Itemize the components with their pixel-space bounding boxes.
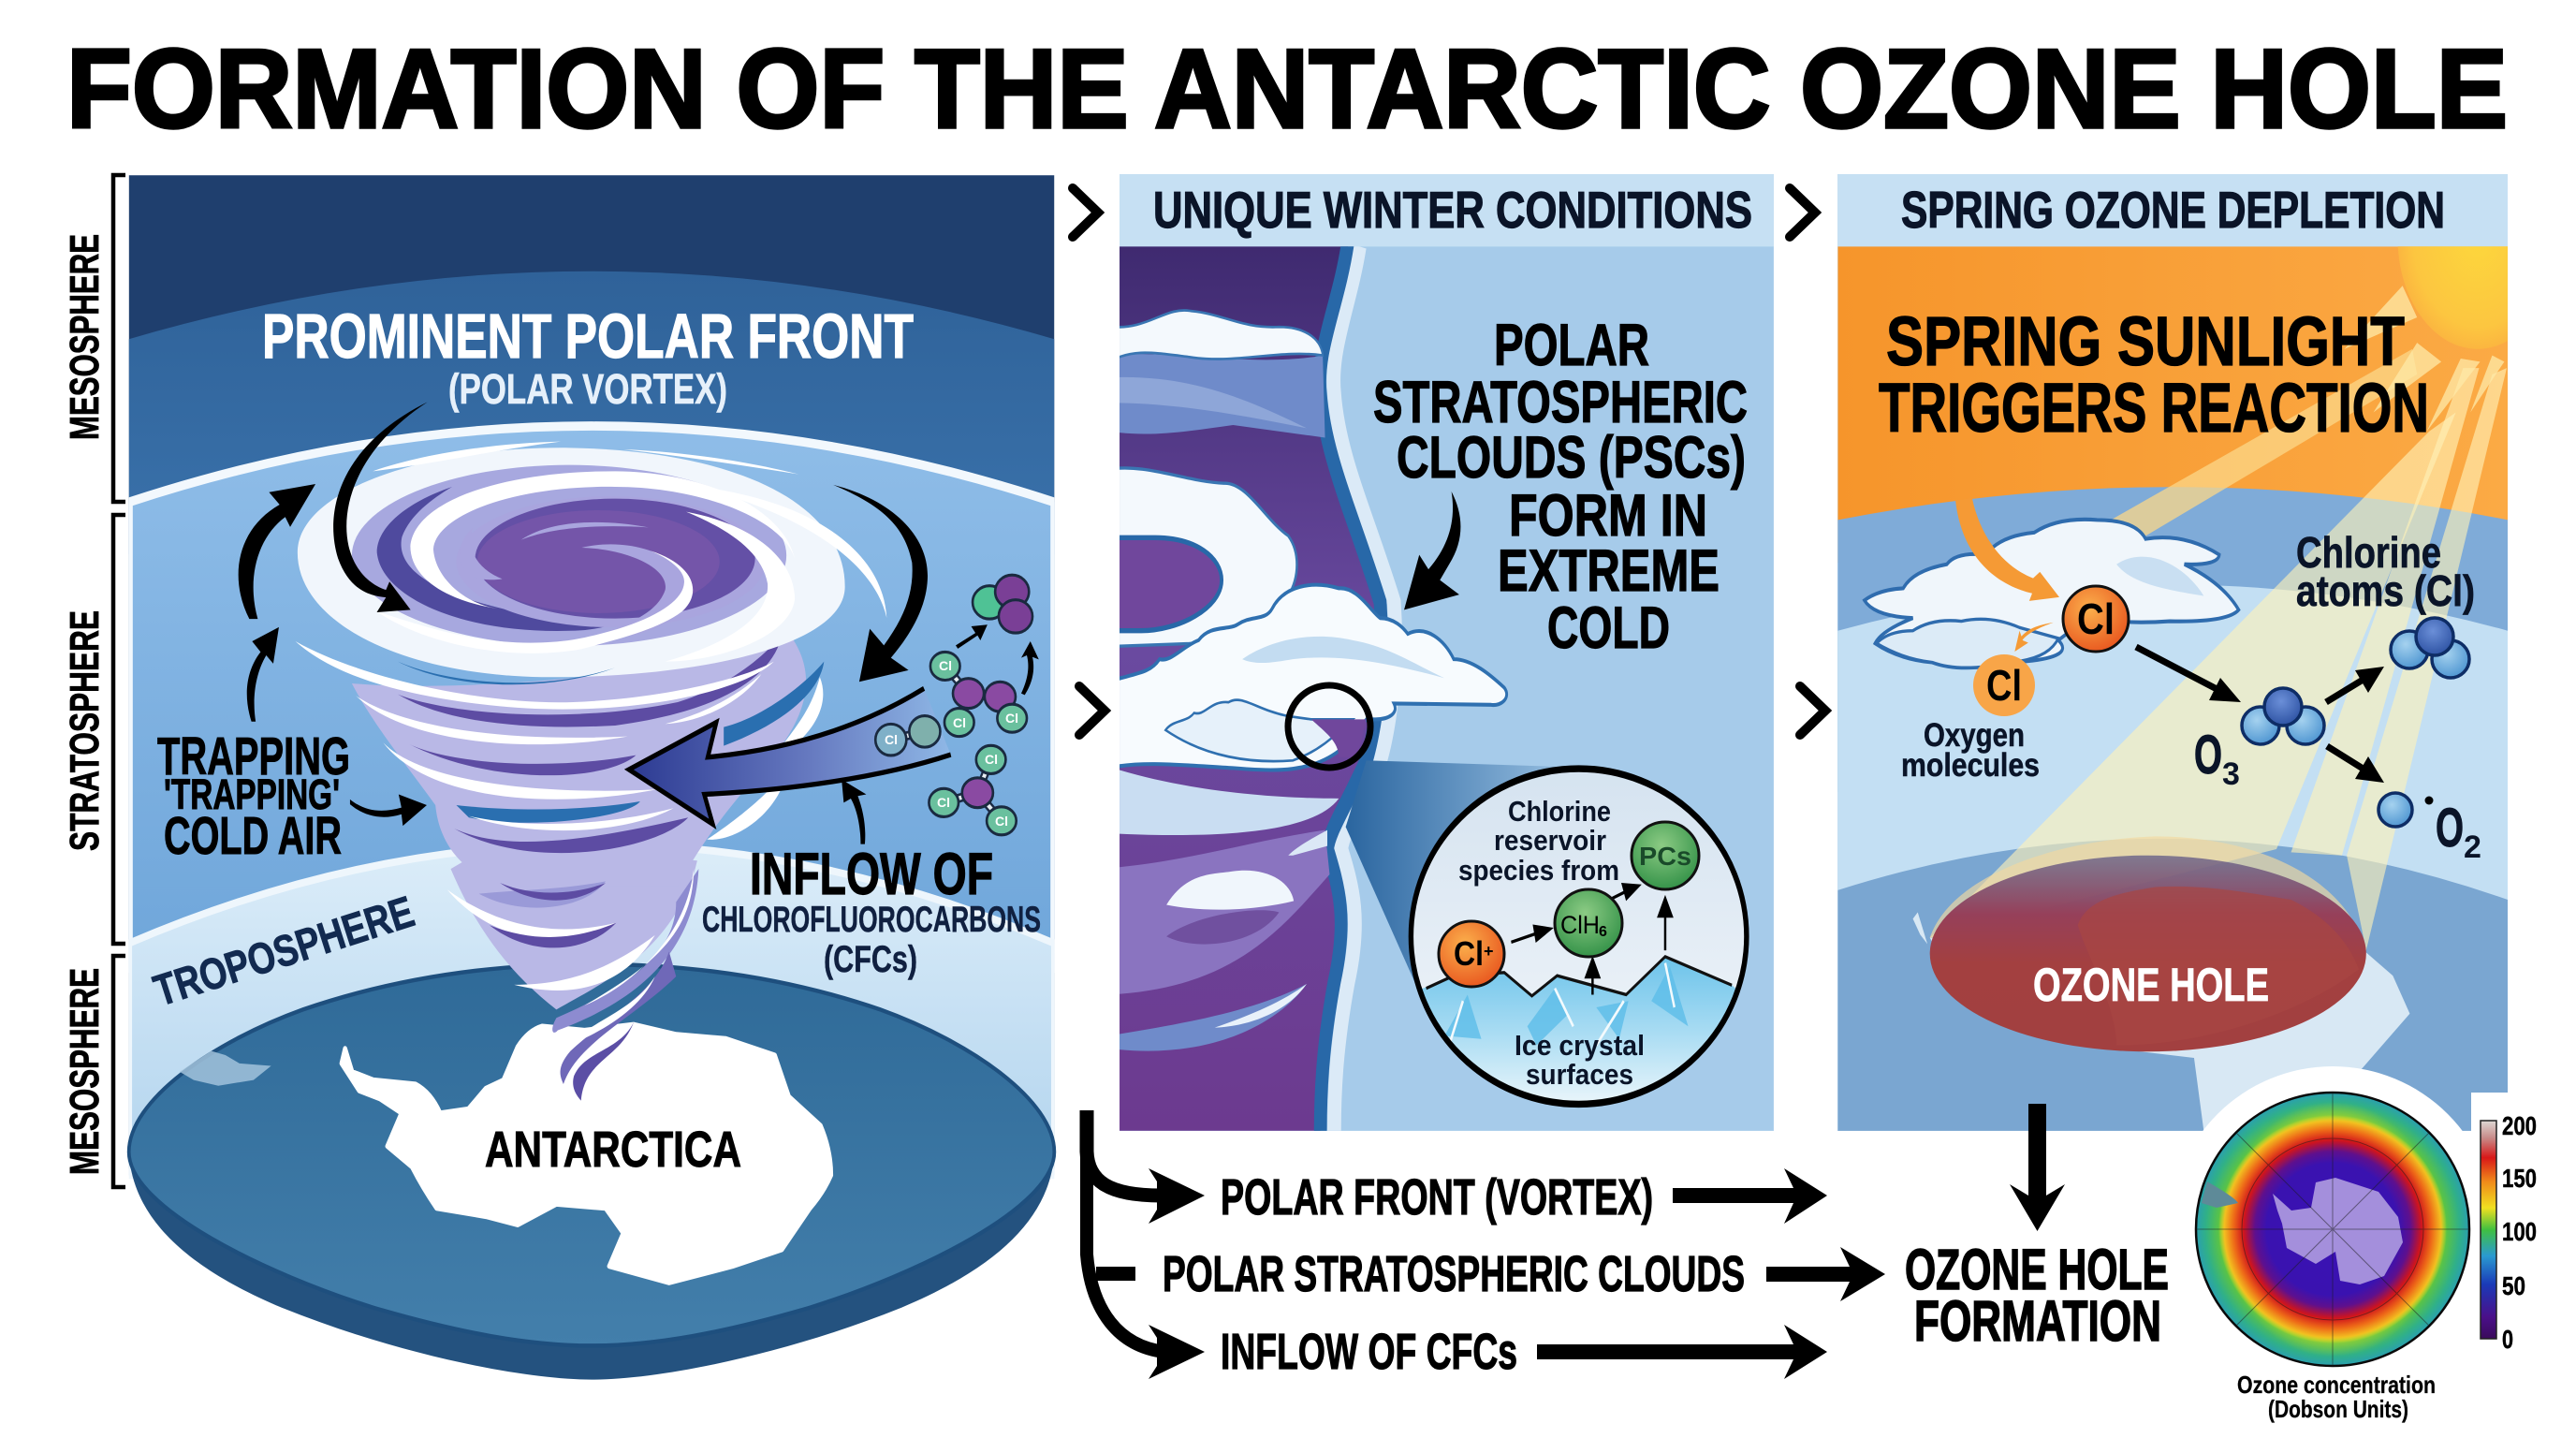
arrow: clouds to formation — [1766, 1247, 1885, 1301]
arrow: polar front to formation — [1673, 1168, 1827, 1224]
flow label: polar front: POLAR FRONT (VORTEX) — [1221, 1169, 1653, 1225]
colorbar — [2481, 1111, 2537, 1354]
inset: chlorine reactions on ice crystal: reservoir — [1494, 824, 1606, 857]
map caption — [2237, 1371, 2436, 1423]
inset zoom funnel — [1346, 760, 1601, 982]
label: Antarctica: ANTARCTICA — [485, 1122, 741, 1178]
atmospheric layer labels: MESOSPHERE — [62, 234, 108, 440]
headings and labels: Oxygen — [1924, 717, 2025, 754]
inset: chlorine reactions on ice crystal: 6 — [1599, 924, 1607, 940]
panel: atmosphere and polar vortex — [62, 175, 1054, 1380]
inset: chlorine reactions on ice crystal: surfaces — [1526, 1058, 1633, 1091]
text: polar stratospheric clouds form in extreme cold: POLAR — [1494, 313, 1649, 378]
arrow: trapping — [350, 795, 427, 826]
white halo and ozone map — [2170, 1066, 2513, 1392]
magnifier on cloud — [1288, 685, 1370, 768]
arrow: circulation left lower — [247, 627, 279, 722]
result: ozone hole formation: FORMATION — [1914, 1289, 2161, 1353]
earth disk with Antarctica — [129, 964, 1054, 1380]
colorbar: 100 — [2502, 1217, 2537, 1246]
result: ozone hole formation — [1905, 1238, 2169, 1353]
inset: chlorine reactions on ice crystal: species from — [1458, 854, 1619, 887]
ozone molecules and reaction arrows — [2136, 618, 2469, 827]
headings and labels: Chlorine — [2296, 528, 2441, 577]
headings and labels: molecules — [1901, 747, 2040, 784]
molecules: Cl — [985, 752, 998, 767]
atmospheric layer labels: MESOSPHERE — [62, 968, 108, 1175]
headings and labels — [1879, 181, 2481, 1011]
polar vortex — [296, 442, 886, 1101]
molecules — [875, 575, 1039, 835]
map caption: Ozone concentration — [2237, 1371, 2436, 1399]
headings and labels: O — [2436, 798, 2464, 858]
arrow: orange pointing to chlorine — [1955, 498, 2059, 652]
headings and labels: 3 — [2222, 756, 2240, 792]
molecules: Cl — [1005, 711, 1018, 726]
arrow: CFCs to formation — [1537, 1325, 1827, 1379]
atmospheric layer labels: STRATOSPHERE — [62, 610, 108, 851]
chlorine atoms: Cl — [2077, 594, 2115, 643]
headings and labels: 2 — [2464, 829, 2481, 865]
arrow: inflow pointer — [842, 780, 866, 844]
label: inflow of chlorofluorocarbons: CHLOROFLUOROCARBONS — [702, 900, 1041, 940]
map caption: (Dobson Units) — [2268, 1395, 2408, 1423]
text: polar stratospheric clouds form in extreme cold: CLOUDS (PSCs) — [1397, 425, 1746, 491]
flow chevrons — [1073, 188, 1825, 735]
label: trapping cold air — [157, 726, 350, 866]
label: trapping cold air: TRAPPING — [157, 726, 350, 786]
molecules: Cl — [939, 658, 952, 673]
inset: chlorine reactions on ice crystal: ClH — [1560, 911, 1600, 939]
arrow: to clouds — [1404, 492, 1460, 609]
colorbar: 0 — [2502, 1325, 2513, 1354]
heading: prominent polar front: PROMINENT POLAR FRONT — [262, 301, 914, 372]
headings and labels: atoms (Cl) — [2296, 566, 2475, 615]
headings and labels: SPRING SUNLIGHT — [1886, 302, 2405, 380]
heading: prominent polar front: (POLAR VORTEX) — [448, 365, 727, 413]
label: inflow of chlorofluorocarbons — [702, 842, 1041, 980]
arrow: depletion down to formation — [2010, 1104, 2065, 1231]
headings and labels: OZONE HOLE — [2033, 959, 2269, 1011]
label: inflow of chlorofluorocarbons: INFLOW OF — [750, 842, 993, 907]
molecules: Cl — [885, 732, 898, 747]
inset: chlorine reactions on ice crystal: + — [1484, 942, 1494, 961]
flow label: polar stratospheric clouds: POLAR STRATOSPHERIC CLOUDS — [1163, 1246, 1745, 1302]
inset: chlorine reactions on ice crystal — [1408, 769, 1757, 1108]
label: troposphere: TROPOSPHERE — [148, 886, 419, 1016]
molecules: Cl — [937, 795, 950, 810]
arrow: CFC inflow — [629, 688, 951, 824]
label: inflow of chlorofluorocarbons: (CFCs) — [824, 939, 917, 980]
colorbar: 200 — [2502, 1111, 2537, 1140]
inset: chlorine reactions on ice crystal: Chlorine — [1508, 795, 1611, 828]
arrow: polar vortex pointer — [333, 402, 428, 612]
panel: unique winter conditions — [1095, 174, 1774, 1134]
text: polar stratospheric clouds form in extreme cold: STRATOSPHERIC — [1373, 370, 1748, 435]
inset: chlorine reactions on ice crystal: Cl — [1454, 934, 1484, 973]
text: polar stratospheric clouds form in extreme cold: COLD — [1547, 595, 1670, 661]
text: polar stratospheric clouds form in extreme cold: FORM IN — [1509, 483, 1707, 549]
flow bar and curved arrows — [1087, 1110, 1205, 1379]
inset: chlorine reactions on ice crystal: Ice crystal — [1515, 1029, 1645, 1062]
headings and labels: O — [2194, 725, 2222, 785]
inset: chlorine reactions on ice crystal: PCs — [1639, 842, 1691, 871]
heading: prominent polar front — [262, 301, 914, 413]
arrow: circulation right — [833, 485, 928, 682]
label: trapping cold air: 'TRAPPING' — [164, 770, 340, 818]
panel: spring ozone depletion — [1837, 174, 2509, 1131]
result: ozone hole formation: OZONE HOLE — [1905, 1238, 2169, 1301]
atmospheric layer labels — [62, 175, 125, 1187]
flow label: inflow of CFCs: INFLOW OF CFCs — [1221, 1324, 1517, 1380]
title: FORMATION OF THE ANTARCTIC OZONE HOLE — [66, 26, 2508, 152]
molecules: Cl — [953, 715, 966, 730]
clouds — [1865, 520, 2239, 668]
label: trapping cold air: COLD AIR — [164, 806, 342, 866]
arrow: circulation left upper — [239, 484, 315, 619]
colorbar: 150 — [2502, 1164, 2537, 1193]
sun rays — [2345, 286, 2504, 432]
text: polar stratospheric clouds form in extreme cold — [1373, 313, 1748, 661]
chlorine atoms: Cl — [1986, 661, 2022, 710]
text: polar stratospheric clouds form in extreme cold: EXTREME — [1498, 538, 1720, 604]
chlorine atoms — [1973, 586, 2129, 716]
heading: unique winter conditions: UNIQUE WINTER CONDITIONS — [1153, 181, 1752, 239]
colorbar: 50 — [2502, 1271, 2525, 1300]
molecules: Cl — [995, 814, 1008, 829]
